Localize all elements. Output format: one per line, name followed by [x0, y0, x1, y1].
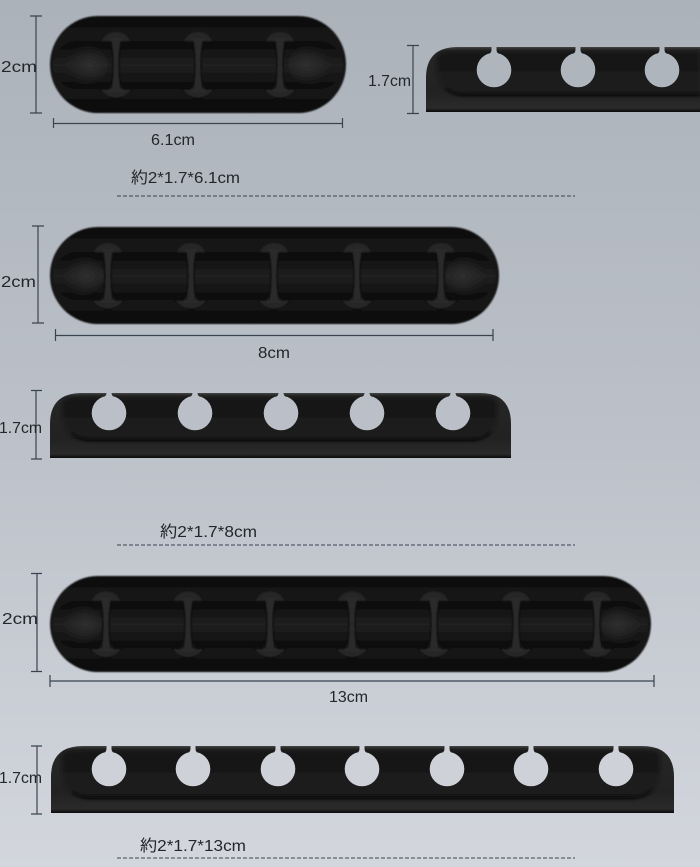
size caption 13cm: 約2*1.7*13cm [140, 837, 246, 855]
dimension: 13cm width [50, 675, 654, 706]
dimension: 8cm width [56, 329, 493, 362]
dimension: 8cm height [1, 226, 44, 323]
dimension: 13cm side height: 1.7cm [0, 770, 42, 787]
dimension: 6.1cm side height: 1.7cm [368, 73, 411, 90]
dimension: 6.1cm width: 6.1cm [151, 132, 195, 149]
dimension: 8cm height: 2cm [1, 274, 36, 291]
dimension: 13cm side height [0, 746, 42, 814]
dashed divider [117, 857, 575, 859]
product: 13cm top view [50, 576, 651, 672]
dimension: 6.1cm height: 2cm [1, 59, 37, 76]
product: 6.1cm side view [426, 45, 700, 112]
product: 6.1cm top view [50, 16, 346, 113]
dimension: 6.1cm side height [368, 46, 419, 114]
size caption 8cm: 約2*1.7*8cm [160, 523, 257, 541]
dimension: 6.1cm height [1, 16, 42, 113]
product: 13cm side view [51, 744, 674, 813]
dashed divider [117, 195, 575, 197]
dimension: 8cm width: 8cm [258, 345, 290, 362]
dashed divider [117, 544, 575, 546]
dimension: 13cm height [2, 574, 42, 672]
dimension: 8cm side height: 1.7cm [0, 420, 42, 437]
dimension: 13cm height: 2cm [2, 611, 38, 628]
dimension: 8cm side height [0, 390, 42, 459]
dimension: 13cm width: 13cm [329, 689, 368, 706]
size caption 6.1cm: 約2*1.7*6.1cm [131, 169, 240, 187]
dimension: 6.1cm width [54, 118, 342, 149]
product: 8cm top view [50, 227, 499, 324]
product: 8cm side view [50, 388, 511, 458]
